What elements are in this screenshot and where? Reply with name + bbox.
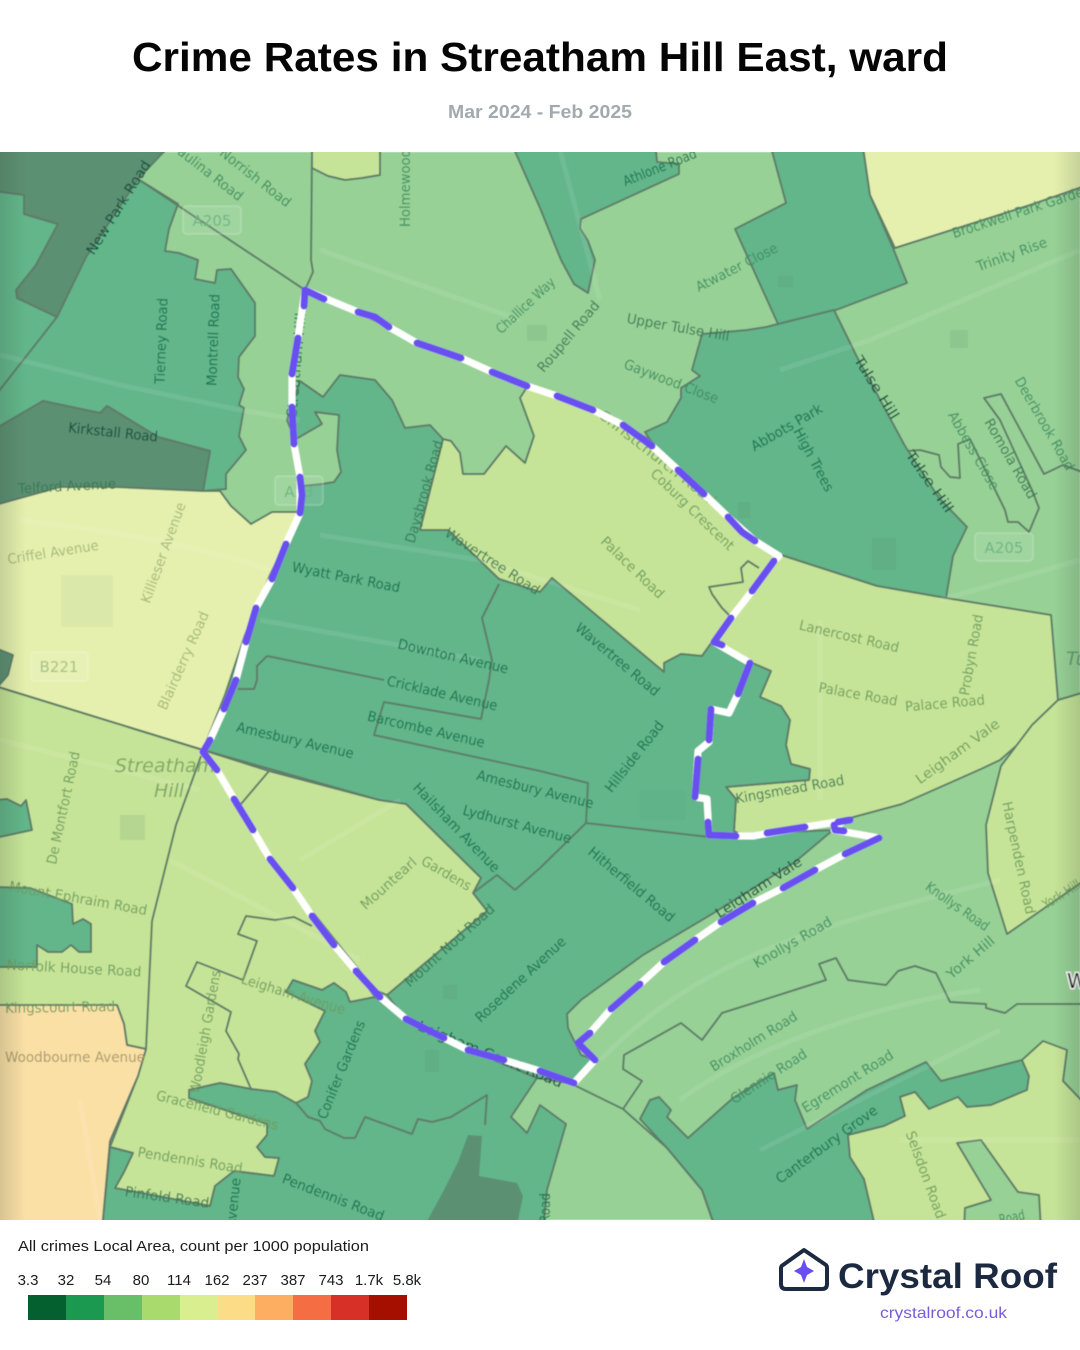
legend scale labels: 387 (280, 1272, 306, 1289)
street labels: York Hill (943, 933, 998, 983)
street labels: Conifer Gardens (315, 1018, 369, 1122)
street labels: Broxholm Road (707, 1009, 801, 1075)
area: south-east light inset (957, 1140, 1041, 1230)
logo: Crystal Roof (781, 1250, 1057, 1322)
street labels: Barcombe Avenue (366, 709, 486, 751)
area: north-west mid green (0, 179, 255, 491)
logo wordmark: Crystal Roof (838, 1257, 1057, 1296)
legend title: All crimes Local Area, count per 1000 population (18, 1238, 369, 1255)
street labels: Rosedene Avenue (472, 934, 570, 1026)
street labels: Gardens (418, 853, 474, 895)
area: Harpenden yellow-green (986, 692, 1080, 934)
legend scale labels: 5.8k (393, 1272, 422, 1289)
street labels: Knollys Road (751, 914, 835, 972)
street labels: Kirkstall Road (67, 420, 159, 446)
badge: B221: B221 (40, 658, 78, 676)
street labels: Tierney Road (152, 298, 171, 385)
legend scale labels: 80 (133, 1272, 149, 1289)
street labels: Gaywood Close (621, 357, 721, 407)
street labels: Tulse Hill (901, 447, 956, 516)
map edge shading (0, 152, 1080, 1220)
street labels: Upper Tulse Hill (625, 311, 731, 345)
area: small dark edge (0, 648, 13, 690)
street labels: Harpenden Road (998, 800, 1038, 916)
area: south mid green (102, 980, 566, 1230)
street labels: Pendennis Road (136, 1145, 244, 1177)
area: pale north-east (864, 152, 1080, 250)
street labels: Blairderry Road (155, 609, 213, 713)
legend scale labels: 114 (167, 1272, 191, 1289)
boundary: white base line (203, 290, 879, 1083)
street labels: Palace Road (597, 534, 667, 602)
ward boundary (203, 290, 879, 1083)
street labels: Montrell Road (204, 294, 224, 386)
badge: B221 (31, 652, 88, 681)
area: south-east yellow-green (848, 1041, 1080, 1230)
street labels: Lanercost Road (798, 618, 900, 656)
street labels: Glennie Road (728, 1046, 810, 1108)
street labels: Cricklade Avenue (385, 673, 499, 715)
street labels: Canterbury Grove (773, 1103, 881, 1187)
street labels: Road (538, 1193, 554, 1223)
area: Mountearl yellow-green (203, 750, 487, 995)
legend colour bar (28, 1295, 407, 1320)
street labels: Knollys Road (922, 879, 992, 935)
street labels: Amesbury Avenue (235, 720, 355, 762)
area: dark north-west (0, 152, 166, 316)
street labels: De Montfort Road (44, 750, 84, 866)
street labels: Christchurch Road (595, 407, 719, 509)
area: Atwater mid green (735, 140, 907, 324)
legend scale labels: 54 (95, 1272, 111, 1289)
place label: Streatham Hill: Hill (154, 780, 185, 802)
street labels: Mount Ephraim Road (8, 879, 148, 919)
street labels: Woodbourne Avenue (5, 1050, 145, 1066)
legend scale labels: 743 (318, 1272, 344, 1289)
street labels: Atwater Close (693, 240, 781, 296)
street labels: Hitherfield Road (584, 844, 678, 926)
legend scale labels: 237 (242, 1272, 268, 1289)
street labels: Leigham Avenue (239, 972, 347, 1018)
legend scale labels: 1.7k (355, 1272, 384, 1289)
street labels: New Park Road (84, 158, 154, 258)
street labels: Tulse Hill (850, 352, 902, 423)
boundary: purple dashes (203, 290, 879, 1083)
place label: Streatham Hill: Streatham (115, 755, 215, 777)
badge: A205 east (975, 533, 1033, 561)
area: western mid patch two (0, 887, 91, 967)
street labels: Challice Way (493, 275, 559, 337)
area: central yellow-green (420, 384, 781, 672)
badge: A205 west (183, 206, 241, 234)
street labels: Norrish Road (216, 145, 294, 211)
area: pale top (310, 152, 382, 182)
badge: A205 east: A205 (985, 539, 1023, 557)
street labels: Road (998, 1207, 1026, 1229)
street labels: Leigham Vale (913, 716, 1003, 788)
legend scale labels: 162 (204, 1272, 230, 1289)
street labels: Gracefield Gardens (154, 1088, 280, 1134)
street labels: Kingsmead Road (734, 773, 846, 807)
street labels: Abbots Park (748, 401, 826, 455)
logo url: crystalroof.co.uk (880, 1305, 1008, 1322)
street labels: Kingscourt Road (5, 999, 115, 1017)
road number badges (31, 206, 1033, 681)
street labels: Coburg Crescent (647, 466, 737, 554)
street labels: Mount Nod Road (402, 901, 498, 991)
street labels: Athlone Road (621, 146, 699, 190)
legend (18, 1238, 422, 1320)
street labels: Lydhurst Avenue (461, 803, 573, 847)
street labels: Hillside Road (602, 718, 668, 796)
street labels: Roupell Road (535, 298, 603, 376)
area: dark south patch (425, 1135, 523, 1225)
street labels: Selsdon Road (902, 1129, 948, 1221)
street labels: Norfolk House Road (6, 957, 142, 981)
badge: A205 west: A205 (193, 212, 231, 230)
street labels: Pendennis Road (280, 1171, 386, 1225)
street labels: Amesbury Avenue (475, 768, 595, 812)
street labels: Holmewood (398, 149, 414, 227)
street labels: Probyn Road (957, 613, 987, 697)
street labels: Paulina Road (168, 139, 246, 205)
street labels: Mountearl (358, 855, 420, 913)
street labels: Leigham Court Road (415, 1019, 565, 1091)
area: pale west (0, 487, 302, 750)
street labels: Criffel Avenue (6, 538, 100, 568)
badge: A23: A23 (284, 483, 314, 501)
street labels: Wavertree Road (572, 620, 662, 700)
street labels: Abbess Close (944, 409, 1002, 493)
boundary lines (0, 152, 1080, 1225)
street labels: High Trees (790, 425, 836, 495)
area: east yellow-green (715, 555, 1058, 836)
area: western mid patch one (0, 799, 32, 838)
street labels: Killieser Avenue (138, 500, 190, 606)
faint buildings (62, 326, 968, 840)
title: Crime Rates in Streatham Hill East, ward (132, 34, 948, 80)
street labels: Leigham Vale (713, 854, 805, 922)
legend scale labels: 3.3 (18, 1272, 38, 1289)
street labels: Trinity Rise (974, 235, 1050, 276)
area: central mid green (203, 375, 833, 1084)
street labels: Romola Road (981, 416, 1039, 502)
subtitle: date range: Mar 2024 - Feb 2025 (448, 102, 632, 122)
street labels: Telford Avenue (17, 476, 116, 498)
faint road network (0, 150, 1080, 1220)
street labels: Palace Road (904, 693, 986, 715)
badge: A23 (275, 476, 323, 505)
street labels: Egremont Road (799, 1047, 897, 1117)
legend scale labels: 32 (58, 1272, 74, 1289)
street labels: Palace Road (817, 680, 899, 710)
street labels: Woodleigh Gardens (187, 969, 225, 1095)
street labels: Deerbrook Road (1011, 375, 1077, 473)
area: Kirkstall dark (0, 401, 210, 505)
street labels: Avenue (223, 1177, 245, 1229)
area: peach south-west (0, 1005, 146, 1230)
legend scale labels (18, 1272, 422, 1289)
street labels: Pinfold Road (124, 1184, 210, 1212)
area: Streatham yellow-green (0, 686, 375, 1206)
area: Canterbury mid green (640, 1060, 1029, 1230)
street labels: Streatham Hill (284, 312, 310, 418)
area: Abbots Park mid green (645, 310, 967, 598)
street labels: Downton Avenue (396, 636, 510, 678)
street labels: Wavertree Road (442, 525, 542, 599)
icon: house with star (781, 1250, 827, 1289)
street labels: Daysbrook Road (403, 439, 447, 545)
area: Athlone mid green (510, 140, 679, 293)
street labels: Hailsham Avenue (409, 780, 503, 876)
street labels: Wyatt Park Road (290, 560, 402, 596)
